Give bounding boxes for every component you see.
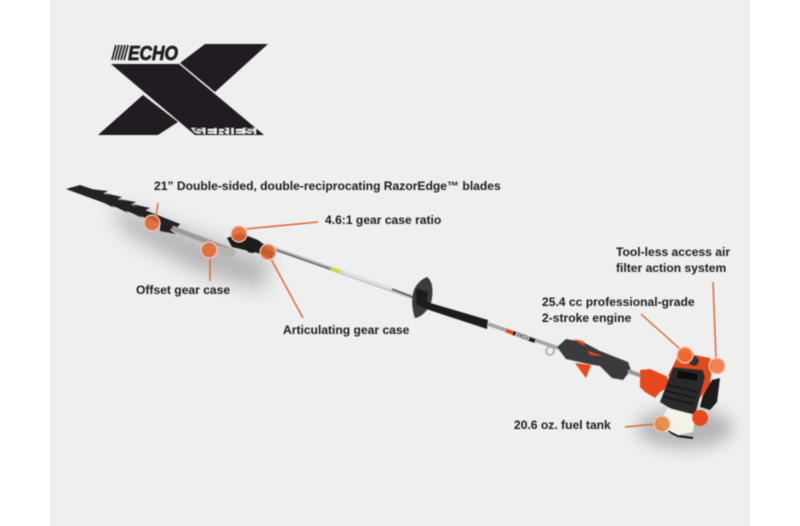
label: engine (542, 295, 695, 363)
label: air filter (616, 245, 730, 374)
tool shadow under blade (110, 205, 270, 290)
gear case (227, 233, 275, 259)
tool shadow under engine (637, 408, 733, 448)
label: gear case ratio (231, 213, 441, 242)
label: articulating gear case: Articulating gear case (283, 323, 410, 337)
engine (640, 352, 720, 415)
label: offset gear case: Offset gear case (136, 283, 230, 297)
label: engine: 2-stroke engine (542, 311, 632, 325)
hand guard (412, 277, 432, 318)
label: articulating gear case (260, 244, 410, 337)
main shaft (266, 246, 415, 298)
label: blades (144, 179, 501, 231)
fuel tank (658, 408, 708, 438)
label: engine: 25.4 cc professional-grade (542, 295, 695, 309)
foam grip (416, 288, 488, 329)
hedge trimmer (66, 185, 720, 438)
blade (66, 185, 180, 234)
label: blades: 21” Double-sided, double-reciprocating RazorEdge™ blades (154, 179, 501, 193)
logo: ECHO wordmark (112, 43, 178, 65)
label: fuel tank: 20.6 oz. fuel tank (514, 418, 611, 432)
rear shaft (488, 324, 558, 355)
label: air filter: Tool-less access air (616, 245, 730, 259)
logo: X mark (98, 44, 268, 135)
logo: Echo X Series (98, 43, 268, 136)
label: offset gear case (136, 242, 230, 297)
offset gear shaft (172, 228, 236, 257)
logo: ECHO wordmark: ECHO (128, 43, 178, 65)
label: air filter: filter action system (616, 261, 726, 275)
rear handle (557, 339, 642, 380)
label: gear case ratio: 4.6:1 gear case ratio (325, 213, 441, 227)
logo: SERIES text (191, 126, 256, 136)
logo: SERIES text: SERIES (193, 126, 255, 136)
rear shaft: ECHO (514, 332, 530, 342)
label: fuel tank (514, 416, 670, 432)
